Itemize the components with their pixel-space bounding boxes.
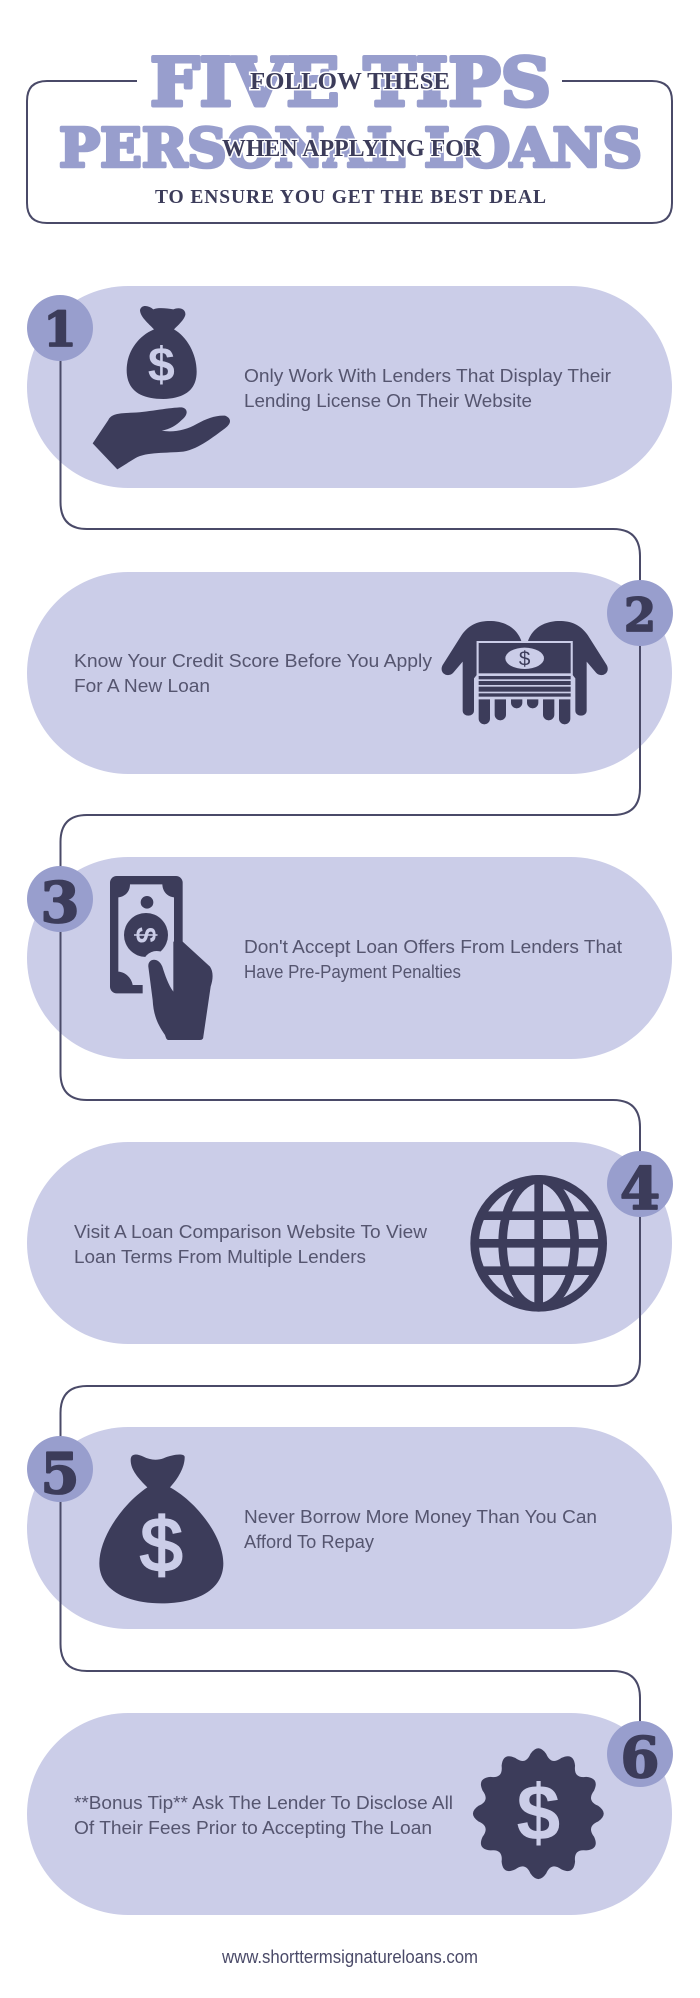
number badge 2: 2 (624, 588, 656, 642)
panel: tip 6 background (27, 1713, 672, 1915)
tip 5 (27, 1436, 597, 1603)
subtitle: when applying for: WHEN APPLYING FOR (222, 136, 482, 162)
tip 1 (27, 295, 611, 469)
icon: hand holding banknote: $ (129, 927, 161, 943)
tip 4 text: Visit A Loan Comparison Website To View (74, 1221, 428, 1242)
tip 6 (74, 1721, 673, 1879)
header frame (27, 81, 672, 223)
connector line linking the numbered tips (60, 328, 640, 1754)
icon: money bag over hand (93, 306, 230, 469)
icon: large money bag (99, 1454, 223, 1603)
number badge 6 (607, 1721, 673, 1791)
tip 3 text: Have Pre-Payment Penalties (244, 961, 461, 982)
tip 2 (74, 580, 673, 724)
tip 3 text (244, 936, 622, 982)
tip 4 (74, 1151, 673, 1307)
tip 5 text: Afford To Repay (244, 1531, 375, 1552)
number badge 1 (27, 295, 93, 361)
tip 4 text: Loan Terms From Multiple Lenders (74, 1246, 366, 1267)
tip 1 text: Lending License On Their Website (244, 390, 532, 411)
panel: tip 3 background (27, 857, 672, 1059)
icon: hands holding cash: $ (519, 647, 531, 670)
tip 4 text (74, 1221, 428, 1267)
footer website: www.shorttermsignatureloans.com (221, 1947, 478, 1967)
panel: tip 2 background (27, 572, 672, 774)
number badge 1: 1 (43, 302, 77, 358)
icon: large money bag: $ (140, 1503, 182, 1588)
number badge 3: 3 (41, 870, 79, 936)
panel: tip 5 background (27, 1427, 672, 1629)
tip 1 text (244, 365, 611, 411)
tip 6 text (74, 1792, 453, 1838)
icon: money bag over hand: $ (148, 338, 175, 392)
icon: scalloped dollar badge (473, 1748, 604, 1879)
tip 6 text: **Bonus Tip** Ask The Lender To Disclose All (74, 1792, 453, 1813)
number badge 6: 6 (621, 1725, 659, 1791)
number badge 5 (27, 1436, 93, 1507)
title: personal loans: PERSONAL LOANS (59, 118, 642, 180)
number badge 4 (607, 1151, 673, 1223)
tip 3 text: Don't Accept Loan Offers From Lenders That (244, 936, 622, 957)
tip 2 text: For A New Loan (74, 675, 210, 696)
number badge 4: 4 (620, 1155, 660, 1223)
tip 1 text: Only Work With Lenders That Display Their (244, 365, 611, 386)
tip 6 text: Of Their Fees Prior to Accepting The Loan (74, 1817, 432, 1838)
icon: hands holding cash (442, 621, 608, 724)
title: five tips: FIVE TIPS (150, 44, 551, 122)
icon: hand holding banknote (110, 876, 213, 1040)
tip 5 text (244, 1506, 597, 1552)
number badge 3 (27, 866, 93, 936)
subtitle: to ensure the best deal: TO ENSURE YOU GET THE BEST DEAL (155, 187, 546, 208)
title (59, 44, 642, 208)
tip 3 (27, 866, 622, 1040)
icon: globe (475, 1179, 603, 1307)
number badge 2 (607, 580, 673, 646)
panel: tip 4 background (27, 1142, 672, 1344)
tip 2 text: Know Your Credit Score Before You Apply (74, 650, 433, 671)
panel: tip 1 background (27, 286, 672, 488)
icon: scalloped dollar badge: $ (516, 1768, 560, 1856)
subtitle: follow these: FOLLOW THESE (250, 69, 450, 95)
tip 5 text: Never Borrow More Money Than You Can (244, 1506, 597, 1527)
tip 2 text (74, 650, 433, 696)
number badge 5: 5 (41, 1441, 79, 1507)
